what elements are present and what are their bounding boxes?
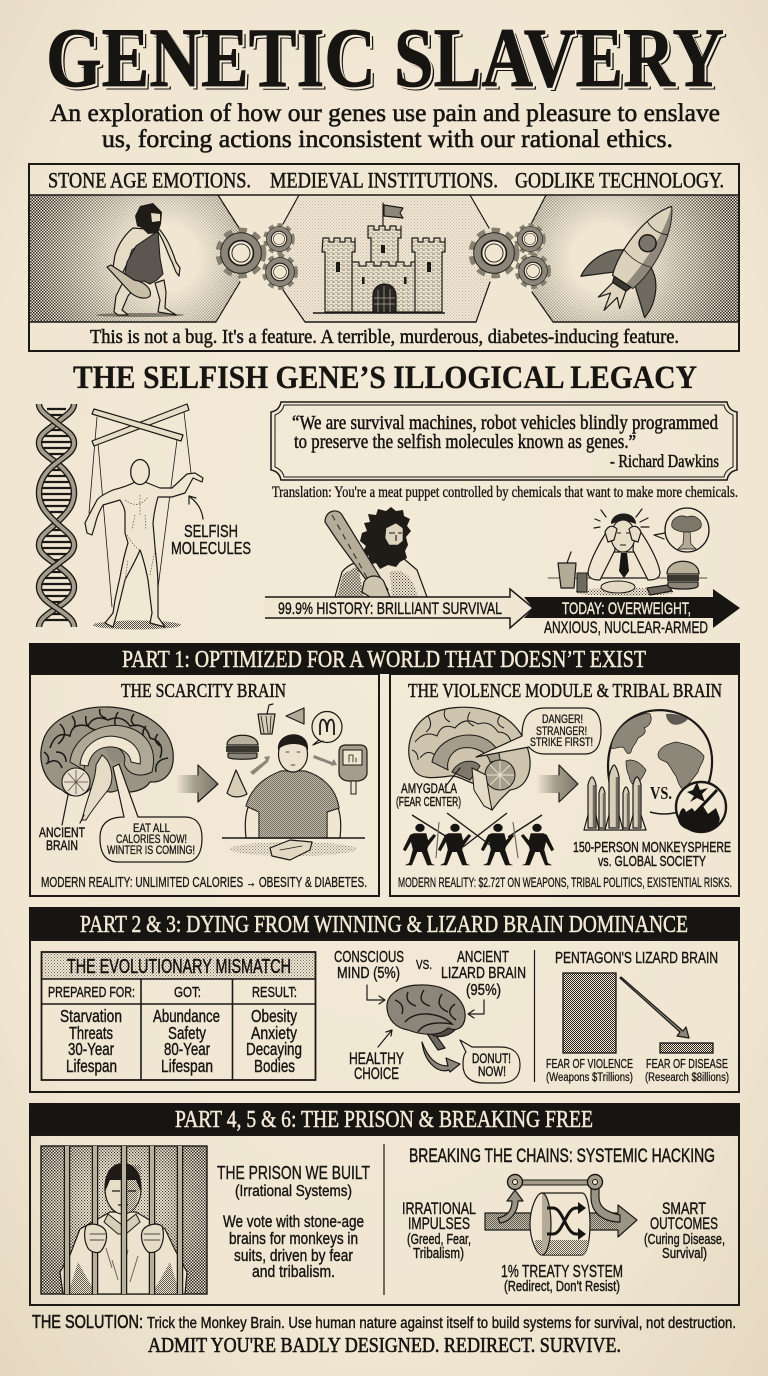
label: selfish molecules (171, 496, 251, 558)
arrow: today: ANXIOUS, NUCLEAR-ARMED (544, 619, 708, 637)
three ages headings (48, 168, 724, 192)
modern reality caption: MODERN REALITY: UNLIMITED CALORIES → OBESITY & DIABETES. (41, 875, 367, 891)
panel: three ages (29, 164, 739, 351)
text: prison we built (217, 1162, 370, 1281)
table: evolutionary mismatch: Lifespan (66, 1056, 117, 1076)
label: smart outcomes: OUTCOMES (650, 1214, 718, 1233)
speech bubble: eat all calories (100, 764, 202, 862)
text: prison we built: brains for monkeys in (229, 1229, 358, 1248)
table: evolutionary mismatch: Obesity (251, 1006, 297, 1026)
table: evolutionary mismatch: Lifespan (161, 1056, 213, 1076)
panel: scarcity brain: THE SCARCITY BRAIN (121, 680, 286, 702)
divider (383, 1144, 385, 1295)
arrow: to donut (422, 1042, 460, 1072)
arrow: brain to weapons (537, 765, 578, 802)
speech bubble: danger: STRANGER! (536, 726, 587, 738)
table: evolutionary mismatch: Starvation (60, 1006, 122, 1026)
icon: DNA helix (39, 404, 74, 627)
diagram: conscious vs lizard brain: VS. (416, 958, 432, 972)
text: prison we built: (Irrational Systems) (235, 1183, 352, 1200)
chart: pentagon budget: FEAR OF VIOLENCE (546, 1056, 633, 1071)
table: evolutionary mismatch: 80-Year (164, 1039, 210, 1059)
speech bubble: danger (476, 708, 601, 757)
part 1 banner: PART 1: OPTIMIZED FOR A WORLD THAT DOESN’T EXIST (122, 647, 646, 673)
caption: This is not a bug. It's a feature. A terrible, murderous, diabetes-inducing feature. (90, 327, 679, 348)
diagram: conscious vs lizard brain: (95%) (466, 982, 501, 999)
diagram: redirect mechanism (485, 1174, 637, 1255)
arrow: today (524, 589, 740, 637)
panel frame (30, 1135, 739, 1305)
panel frame (29, 164, 739, 351)
heading: selfish gene: THE SELFISH GENE’S ILLOGICAL LEGACY (73, 360, 697, 396)
label: smart outcomes: (Curing Disease, (644, 1232, 725, 1248)
label: treaty system: 1% TREATY SYSTEM (501, 1261, 623, 1281)
label: irrational impulses: IMPULSES (408, 1214, 470, 1233)
icon: nuclear thought bubble (654, 508, 709, 552)
divider (534, 950, 536, 1082)
arrow: brain to obesity (176, 765, 218, 802)
table: evolutionary mismatch: Anxiety (251, 1023, 297, 1043)
icon: globe (608, 710, 712, 814)
quote panel (271, 402, 737, 480)
label: ancient brain: ANCIENT (39, 825, 85, 840)
label: treaty system: (Redirect, Don't Resist) (504, 1279, 620, 1295)
label: irrational impulses: IRRATIONAL (402, 1199, 476, 1218)
label: ancient brain: BRAIN (46, 838, 78, 853)
chart: pentagon budget: (Research $8illions) (645, 1072, 729, 1084)
table: evolutionary mismatch: Bodies (254, 1056, 295, 1076)
panel: scarcity brain (30, 674, 379, 896)
arrow: today: TODAY: OVERWEIGHT, (562, 600, 691, 618)
table: evolutionary mismatch: RESULT: (252, 985, 297, 1001)
text: prison we built: suits, driven by fear (234, 1246, 353, 1265)
panel: part 4 5 and 6 (29, 1103, 740, 1305)
table: evolutionary mismatch: 30-Year (68, 1039, 114, 1059)
label: selfish molecules: MOLECULES (171, 538, 251, 558)
subtitle (50, 98, 720, 153)
panel: part 2 and 3 (29, 907, 740, 1092)
icon: sagittal brain (41, 707, 173, 825)
speech bubble: danger: DANGER! (542, 714, 583, 726)
solution line: THE SOLUTION: (32, 1311, 143, 1332)
icon: caveman walking (96, 203, 184, 317)
speech bubble: donut now: NOW! (478, 1064, 506, 1079)
icon: brain (387, 985, 465, 1050)
diagram: conscious vs lizard brain: ANCIENT (457, 949, 509, 966)
icon: tribal fighters (403, 813, 554, 865)
panel frame (30, 940, 739, 1092)
panel: part 1 (29, 643, 740, 896)
closing call to action: ADMIT YOU'RE BADLY DESIGNED. REDIRECT. SURVIVE. (148, 1333, 621, 1357)
three ages headings: GODLIKE TECHNOLOGY. (515, 168, 724, 192)
diagram: conscious vs lizard brain: HEALTHY (349, 1050, 404, 1068)
diagram: conscious vs lizard brain: CHOICE (354, 1065, 399, 1083)
label: irrational impulses: (Greed, Fear, (407, 1232, 471, 1248)
arrows: flowing to man (250, 755, 337, 775)
text: prison we built: and tribalism. (252, 1262, 335, 1281)
arrow: history: 99.9% HISTORY: BRILLIANT SURVIVAL (278, 600, 502, 618)
text: prison we built: THE PRISON WE BUILT (217, 1162, 370, 1183)
vs label: VS. (650, 783, 672, 803)
label: smart outcomes: Survival) (662, 1246, 707, 1262)
icon: caveman with club (325, 507, 427, 597)
part 4 5 6 banner (29, 1103, 740, 1135)
table: evolutionary mismatch: Threats (69, 1023, 113, 1043)
three ages headings: MEDIEVAL INSTITUTIONS. (270, 168, 498, 192)
three ages headings: STONE AGE EMOTIONS. (48, 168, 251, 192)
icon: overweight man with junk food (222, 704, 367, 860)
label: irrational impulses (402, 1199, 476, 1262)
chart: pentagon budget: FEAR OF DISEASE (646, 1056, 728, 1071)
label: monkeysphere: vs. GLOBAL SOCIETY (598, 853, 706, 870)
chart: pentagon budget: PENTAGON'S LIZARD BRAIN (555, 950, 718, 967)
icon: crowd prohibited (676, 782, 726, 832)
label: monkeysphere (573, 839, 731, 870)
table: evolutionary mismatch: PREPARED FOR: (48, 985, 135, 1001)
speech bubble: donut now: DONUT! (472, 1051, 511, 1066)
icon: anxious man at table (548, 508, 709, 596)
chart: pentagon budget: (Weapons $Trillions) (546, 1072, 633, 1084)
label: amygdala: (FEAR CENTER) (396, 794, 461, 809)
speech bubble: eat all calories: CALORIES NOW! (116, 832, 187, 846)
table: evolutionary mismatch: Decaying (246, 1039, 302, 1059)
icon: amygdala brain (409, 707, 530, 810)
table: evolutionary mismatch (42, 952, 316, 1080)
diagram: conscious vs lizard brain: MIND (5%) (337, 965, 400, 982)
icon: castle (313, 203, 445, 313)
text: prison we built: We vote with stone-age (223, 1212, 364, 1231)
label: treaty system (501, 1261, 623, 1295)
label: irrational impulses: Tribalism) (413, 1246, 464, 1262)
subtitle: An exploration of how our genes use pain and pleasure to enslave (50, 98, 720, 127)
table: evolutionary mismatch: Abundance (153, 1006, 220, 1026)
icon: food items (226, 704, 304, 797)
label: amygdala: AMYGDALA (401, 781, 457, 796)
label: smart outcomes: SMART (662, 1199, 706, 1218)
icon: missiles (584, 765, 646, 830)
icon: man behind bars (41, 1146, 207, 1294)
label: selfish molecules: SELFISH (184, 521, 238, 541)
panel: violence module (390, 674, 739, 896)
icon: glucose meter (339, 745, 367, 794)
icon: drink and burger (558, 552, 699, 595)
diagram: conscious vs lizard brain (334, 949, 526, 1083)
quote panel: - Richard Dawkins (610, 451, 719, 471)
icon: fast food thought bubble (312, 712, 342, 745)
speech bubble: donut now (460, 1040, 520, 1083)
speech bubble: eat all calories: EAT ALL (133, 821, 170, 835)
quote panel: to preserve the selfish molecules known as genes.” (294, 431, 636, 453)
label: amygdala (396, 781, 461, 809)
icon: gears (219, 225, 549, 288)
speech bubble: danger: STRIKE FIRST! (530, 737, 593, 749)
table: evolutionary mismatch: Safety (168, 1023, 206, 1043)
solution line (32, 1311, 736, 1332)
diagram: conscious vs lizard brain: LIZARD BRAIN (441, 965, 526, 982)
chart: pentagon budget (546, 950, 729, 1084)
table: evolutionary mismatch: THE EVOLUTIONARY MISMATCH (67, 956, 291, 978)
diagram: conscious vs lizard brain: CONSCIOUS (334, 949, 404, 966)
table: evolutionary mismatch: GOT: (174, 985, 201, 1001)
label: ancient brain (39, 825, 85, 853)
arrow: history (265, 589, 533, 628)
icon: rocket (572, 185, 704, 331)
subtitle: us, forcing actions inconsistent with our rational ethics. (102, 124, 673, 153)
icon: puppet on strings (85, 404, 203, 630)
speech bubble: eat all calories: WINTER IS COMING! (107, 843, 195, 857)
halftone strip (29, 195, 739, 322)
label: smart outcomes (644, 1199, 725, 1262)
part 4 5 6 banner: PART 4, 5 & 6: THE PRISON & BREAKING FREE (175, 1107, 593, 1133)
